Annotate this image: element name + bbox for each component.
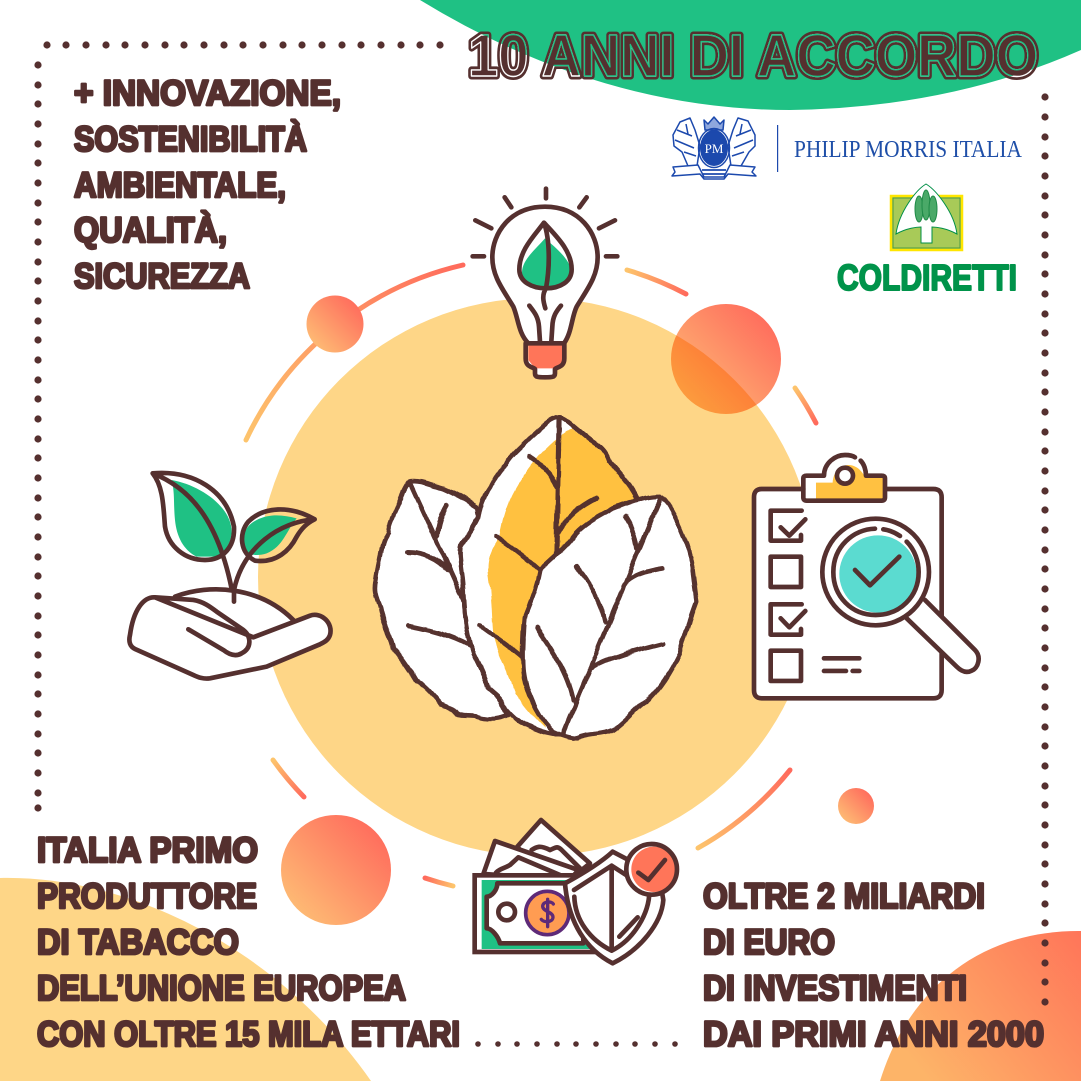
text block: investimenti xyxy=(703,877,1044,1054)
crest xyxy=(672,117,756,179)
title: 10 ANNI DI ACCORDO xyxy=(468,23,1038,89)
text block: innovazione xyxy=(74,74,341,296)
text block: innovazione: + INNOVAZIONE, xyxy=(74,74,341,113)
logo: Philip Morris Italia xyxy=(672,117,1023,179)
bottom left yellow corner shape xyxy=(0,878,371,1081)
decorative gradient circles xyxy=(281,296,874,925)
text block: investimenti: DAI PRIMI ANNI 2000 xyxy=(703,1015,1044,1054)
icon: light bulb with leaf xyxy=(473,189,617,377)
dotted frame: bottom row xyxy=(475,1041,678,1047)
top green corner shape xyxy=(420,0,1081,110)
text block: italia primo produttore: DELL’UNIONE EUROPEA xyxy=(37,969,406,1008)
text block: investimenti: DI EURO xyxy=(703,923,835,962)
left leaf xyxy=(375,481,508,719)
text block: italia primo produttore: PRODUTTORE xyxy=(37,877,257,916)
text block: innovazione: SOSTENIBILITÀ xyxy=(74,119,307,159)
icon: clipboard with magnifying glass xyxy=(754,455,979,698)
icon: sprout in hand xyxy=(129,473,331,679)
icon: tobacco leaves xyxy=(375,417,697,738)
text block: italia primo produttore: CON OLTRE 15 MILA ETTARI xyxy=(37,1015,460,1054)
text block: innovazione: SICUREZZA xyxy=(74,257,250,296)
title: 10 ANNI DI ACCORDO xyxy=(468,23,1038,89)
text block: italia primo produttore: ITALIA PRIMO xyxy=(37,831,258,870)
title: 10 ANNI DI ACCORDO xyxy=(468,23,1038,89)
divider xyxy=(777,125,778,172)
central yellow circle xyxy=(258,298,816,856)
logo: Coldiretti: COLDIRETTI xyxy=(837,257,1017,298)
text block: italia primo produttore: DI TABACCO xyxy=(37,923,239,962)
text block: italia primo produttore xyxy=(37,831,460,1054)
wordmark: PHILIP MORRIS ITALIA xyxy=(794,137,1023,163)
text block: investimenti: DI INVESTIMENTI xyxy=(703,969,967,1008)
text block: innovazione: AMBIENTALE, xyxy=(74,166,286,205)
bottom right orange corner shape xyxy=(880,931,1081,1081)
logo: Coldiretti xyxy=(837,184,1017,298)
text block: innovazione: QUALITÀ, xyxy=(74,210,227,250)
PM monogram: PM xyxy=(705,141,724,156)
text block: investimenti: OLTRE 2 MILIARDI xyxy=(703,877,985,916)
right leaf xyxy=(523,496,697,738)
title xyxy=(468,31,1039,80)
gradient arcs around the circle xyxy=(246,265,816,886)
middle leaf xyxy=(460,417,638,735)
icon: money and shield xyxy=(475,820,677,963)
